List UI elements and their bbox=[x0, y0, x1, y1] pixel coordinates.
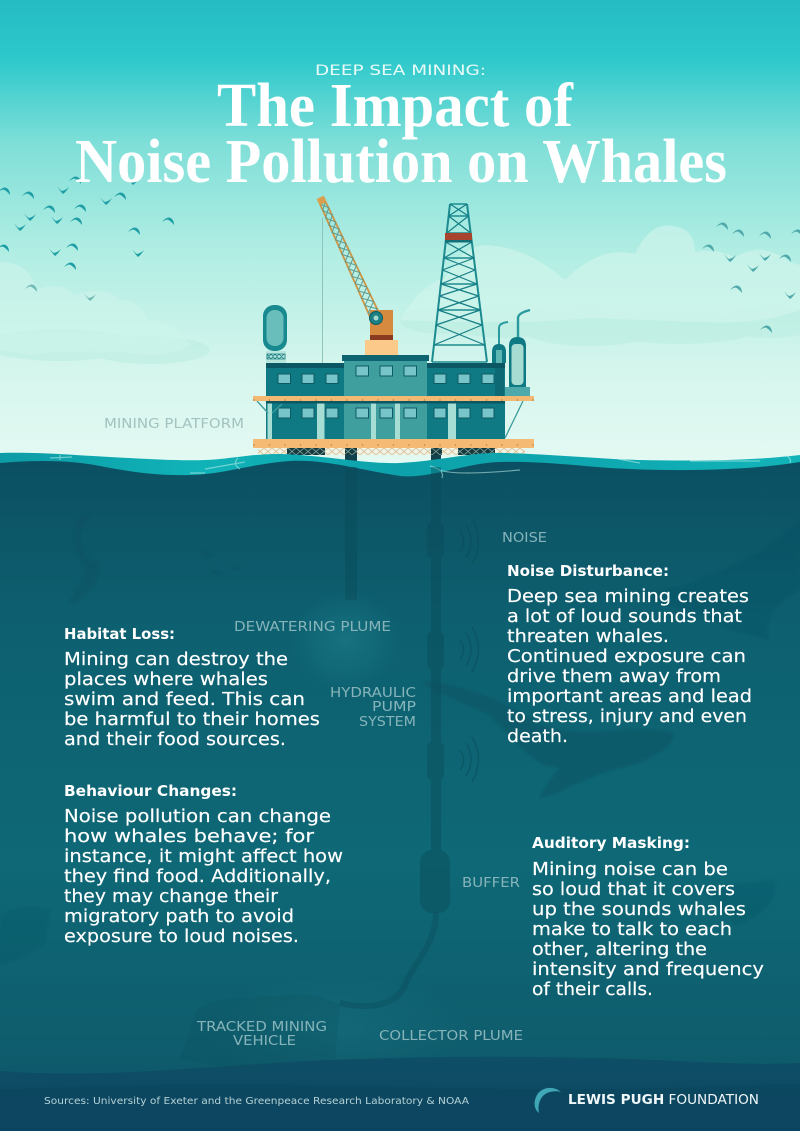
crane base bbox=[365, 340, 398, 355]
upper storey bbox=[266, 355, 505, 396]
text block: behaviour changes bbox=[64, 782, 343, 947]
body: auditory masking: intensity and frequency bbox=[532, 960, 764, 980]
crane wheel bbox=[370, 312, 382, 324]
crane boom bbox=[316, 195, 381, 320]
body: noise disturbance: threaten whales. bbox=[507, 627, 669, 647]
tracked mining vehicle bbox=[180, 995, 340, 1077]
logo: lewis pugh foundation bbox=[535, 1088, 759, 1113]
noise waves bbox=[460, 519, 478, 782]
annotation labels bbox=[104, 417, 547, 1049]
body: auditory masking: up the sounds whales bbox=[532, 900, 746, 920]
heading: habitat loss: Habitat Loss: bbox=[64, 625, 175, 643]
seabed footer band bbox=[0, 1057, 800, 1131]
crane bbox=[316, 195, 398, 363]
body: behaviour changes: Noise pollution can change bbox=[64, 807, 331, 827]
clouds bbox=[0, 226, 800, 364]
body: auditory masking: other, altering the bbox=[532, 940, 707, 960]
sea surface wave bbox=[0, 453, 800, 490]
lower right whale bbox=[700, 880, 775, 925]
flexible hose bbox=[340, 912, 436, 1006]
body: noise disturbance: death. bbox=[507, 727, 568, 747]
label: collector plume: COLLECTOR PLUME bbox=[379, 1029, 523, 1044]
crane cab bbox=[370, 310, 393, 340]
body: behaviour changes: instance, it might affect how bbox=[64, 847, 343, 867]
label: mining platform: MINING PLATFORM bbox=[104, 417, 244, 432]
birds: right flock bbox=[702, 223, 800, 333]
logo wordmark: LEWIS PUGH FOUNDATION bbox=[568, 1093, 759, 1108]
body: auditory masking: make to talk to each bbox=[532, 920, 732, 940]
wave highlights bbox=[50, 455, 790, 478]
plume glows bbox=[210, 590, 470, 1085]
logo crescent icon bbox=[535, 1088, 561, 1113]
label: tracked mining vehicle bbox=[196, 1020, 327, 1049]
body: auditory masking bbox=[532, 860, 764, 1000]
body: habitat loss: swim and feed. This can bbox=[64, 690, 305, 710]
sources line: Sources: University of Exeter and the Greenpeace Research Laboratory & NOAA bbox=[44, 1096, 469, 1107]
small fish bbox=[201, 549, 241, 575]
drilling derrick bbox=[432, 204, 487, 362]
eyebrow heading: DEEP SEA MINING: bbox=[315, 63, 486, 79]
title block bbox=[75, 63, 727, 196]
platform legs bbox=[345, 455, 441, 467]
body: habitat loss: places where whales bbox=[64, 670, 268, 690]
truss under deck bbox=[258, 448, 525, 455]
body: noise disturbance: drive them away from bbox=[507, 667, 721, 687]
dewatering pipe bbox=[345, 467, 357, 600]
label: hydraulic pump system: HYDRAULIC bbox=[330, 686, 416, 701]
body: noise disturbance: Continued exposure can bbox=[507, 647, 746, 667]
body: noise disturbance: to stress, injury and even bbox=[507, 707, 747, 727]
small exhaust tank bbox=[492, 322, 508, 363]
whale silhouettes bbox=[0, 513, 800, 965]
back cloud band bbox=[0, 306, 800, 364]
derrick red band bbox=[445, 233, 472, 242]
hydraulic pump riser bbox=[420, 467, 450, 913]
birds: left flock bbox=[0, 177, 174, 301]
body: noise disturbance: Deep sea mining creates bbox=[507, 587, 749, 607]
label: dewatering plume: DEWATERING PLUME bbox=[234, 620, 391, 635]
seal bbox=[69, 513, 100, 604]
body: noise disturbance: important areas and lead bbox=[507, 687, 752, 707]
deep water bbox=[0, 461, 800, 1131]
text block: habitat loss bbox=[64, 625, 320, 750]
heading: behaviour changes: Behaviour Changes: bbox=[64, 782, 237, 800]
large exhaust tank bbox=[504, 310, 530, 396]
right cloud bbox=[400, 226, 800, 322]
water tank bbox=[263, 305, 287, 363]
back seabed wave bbox=[0, 1057, 800, 1131]
main title bbox=[75, 72, 727, 196]
label: hydraulic pump system: PUMP bbox=[372, 700, 416, 715]
upper deck bbox=[253, 396, 534, 401]
text block: noise disturbance bbox=[507, 562, 752, 747]
body: noise disturbance: a lot of loud sounds that bbox=[507, 607, 742, 627]
heading: noise disturbance: Noise Disturbance: bbox=[507, 562, 669, 580]
front seabed wave bbox=[0, 1084, 800, 1131]
body: behaviour changes: migratory path to avoid bbox=[64, 907, 294, 927]
left whale bbox=[0, 907, 50, 965]
mining platform illustration bbox=[253, 195, 534, 467]
support struts bbox=[257, 401, 523, 438]
label: tracked mining vehicle: TRACKED MINING bbox=[196, 1020, 327, 1035]
main title: Noise Pollution on Whales bbox=[75, 128, 727, 196]
body: habitat loss bbox=[64, 650, 320, 750]
label: buffer: BUFFER bbox=[462, 876, 520, 891]
label: noise: NOISE bbox=[502, 531, 547, 546]
body: behaviour changes: they may change their bbox=[64, 887, 279, 907]
left cloud bbox=[0, 262, 190, 355]
body: habitat loss: be harmful to their homes bbox=[64, 710, 320, 730]
windows bbox=[278, 366, 494, 418]
upper right whale bbox=[640, 520, 800, 640]
body: auditory masking: Mining noise can be bbox=[532, 860, 728, 880]
main title: The Impact of bbox=[217, 72, 574, 140]
body: behaviour changes: they find food. Additionally, bbox=[64, 867, 331, 887]
body: behaviour changes bbox=[64, 807, 343, 947]
body: behaviour changes: how whales behave; for bbox=[64, 827, 315, 847]
label: hydraulic pump system: SYSTEM bbox=[359, 715, 416, 730]
lower deck bbox=[253, 439, 534, 448]
sky background bbox=[0, 0, 800, 480]
body: behaviour changes: exposure to loud noises. bbox=[64, 927, 299, 947]
body: habitat loss: Mining can destroy the bbox=[64, 650, 288, 670]
large central whale bbox=[421, 682, 673, 798]
label: hydraulic pump system bbox=[330, 686, 416, 730]
text block: auditory masking bbox=[532, 834, 764, 1000]
body: auditory masking: so loud that it covers bbox=[532, 880, 735, 900]
label: tracked mining vehicle: VEHICLE bbox=[233, 1034, 296, 1049]
heading: auditory masking: Auditory Masking: bbox=[532, 834, 690, 852]
crane cable bbox=[322, 218, 324, 363]
body: auditory masking: of their calls. bbox=[532, 980, 653, 1000]
body: habitat loss: and their food sources. bbox=[64, 730, 286, 750]
body: noise disturbance bbox=[507, 587, 752, 747]
underwater equipment bbox=[180, 467, 478, 1085]
lower storey bbox=[266, 401, 505, 439]
